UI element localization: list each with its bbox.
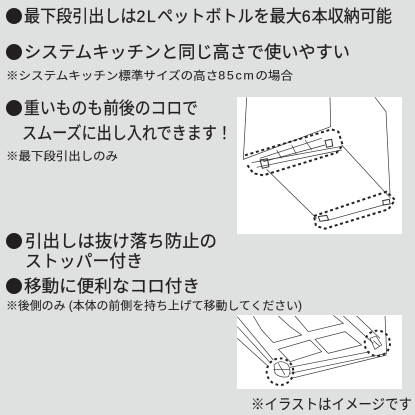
dashed caster highlights [245, 129, 343, 175]
illustration panel: rear casters [237, 315, 402, 389]
feature: bottle storage: 最下段引出しは2Lペットボトルを最大6本収納可能 [24, 7, 392, 26]
feature: moving casters: 移動に便利なコロ付き [24, 277, 200, 296]
dashed caster highlights [267, 358, 293, 385]
note: rear only: ※後側のみ (本体の前側を持ち上げて移動してください) [6, 298, 302, 312]
feature: stopper [6, 232, 217, 271]
feature: casters [6, 99, 232, 143]
note: bottom drawer only: ※最下段引出しのみ [6, 149, 118, 163]
feature: stopper: ストッパー付き [25, 252, 143, 271]
feature: casters: スムーズに出し入れできます！ [22, 124, 232, 143]
note: kitchen height: ※システムキッチン標準サイズの高さ 85cm の場合 [6, 68, 294, 82]
feature: stopper: 引出しは抜け落ち防止の [25, 232, 217, 251]
feature: system kitchen height: システムキッチンと同じ高さで使いやすい [24, 42, 350, 62]
illustration panel: drawer casters [237, 97, 402, 234]
feature: casters: 重いものも前後のコロで [24, 99, 198, 118]
